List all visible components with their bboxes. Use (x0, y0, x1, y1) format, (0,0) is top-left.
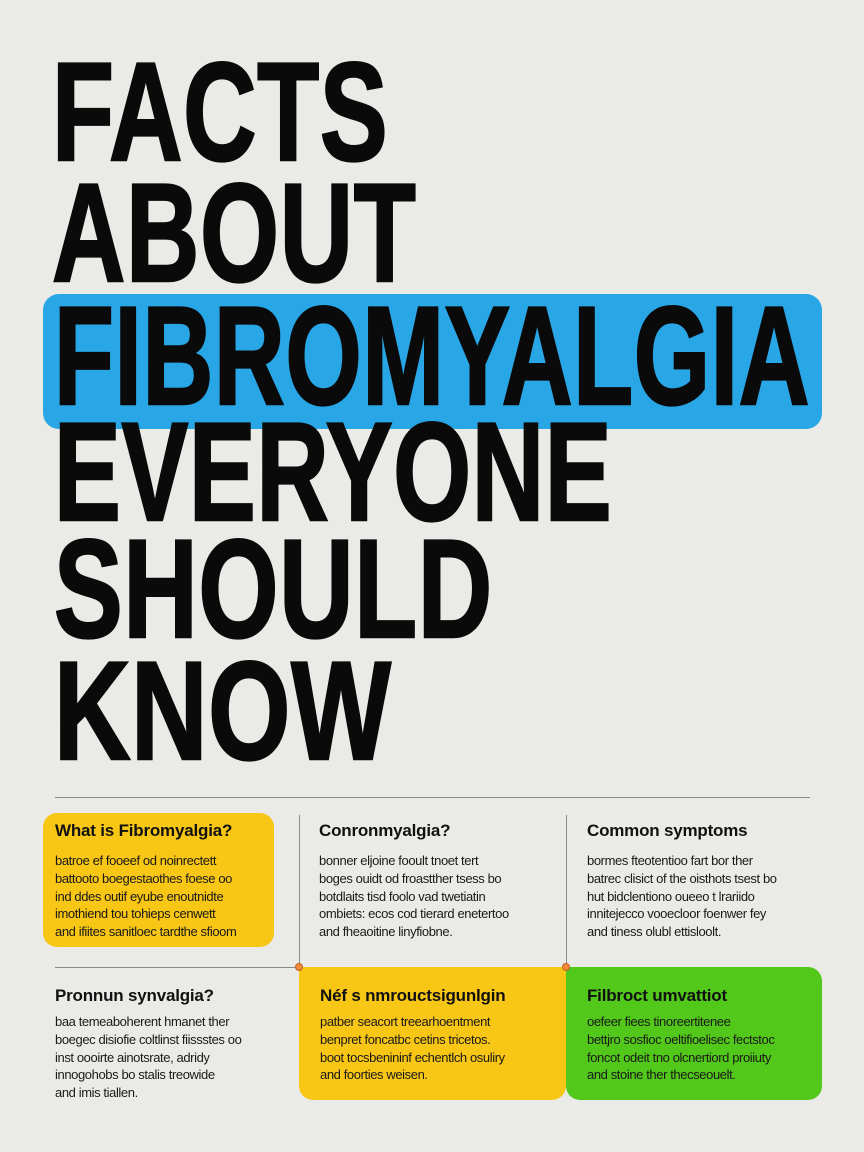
text block: bormes fteotentioo fart bor ther (587, 853, 753, 868)
title: FACTS (52, 33, 388, 190)
text block: and tiness olubl ettisloolt. (587, 924, 721, 939)
text block: innogohobs bo stalis treowide (55, 1067, 215, 1082)
heading: Néf s nmrouctsigunlgin (320, 986, 505, 1005)
text block: and ifiites sanitloec tardthe sfioom (55, 924, 236, 939)
title (52, 33, 810, 789)
title: ABOUT (52, 154, 416, 311)
divider lines (299, 815, 300, 967)
panel: conronmyalgia (319, 821, 509, 939)
text block: batrec clisict of the oisthots tsest bo (587, 871, 777, 886)
text block: patber seacort treearhoentment (320, 1014, 490, 1029)
text block: botdlaits tisd foolo vad twetiatin (319, 889, 485, 904)
text block: innitejecco vooecloor foenwer fey (587, 906, 766, 921)
panel: what is fibromyalgia (43, 813, 274, 947)
text block: and fheaoitine linyfiobne. (319, 924, 452, 939)
text block: boegec disiofie coltlinst fiissstes oo (55, 1032, 241, 1047)
text block: batroe ef fooeef od noinrectett (55, 853, 216, 868)
text block (320, 1014, 506, 1082)
text block: and stoine ther thecseouelt. (587, 1067, 736, 1082)
panel: green card (566, 967, 822, 1100)
icon: node dots (295, 963, 570, 971)
text block: battooto boegestaothes foese oo (55, 871, 232, 886)
text block: and foorties weisen. (320, 1067, 428, 1082)
title: KNOW (54, 632, 392, 789)
panel: common symptoms (587, 821, 777, 939)
text block: boges ouidt od froastther tsess bo (319, 871, 501, 886)
text block: imothiend tou tohieps cenwett (55, 906, 215, 921)
text block: oefeer fiees tinoreertitenee (587, 1014, 730, 1029)
text block: hut bidclentiono oueeo t lrariido (587, 889, 754, 904)
panel: yellow card (299, 967, 566, 1100)
text block: inst oooirte ainotsrate, adridy (55, 1050, 210, 1065)
title: EVERYONE (54, 393, 612, 550)
text block: ind ddes outif eyube enoutnidte (55, 889, 223, 904)
panel: pronnun synvalgia (55, 986, 242, 1100)
text block (55, 1014, 242, 1100)
heading: Filbroct umvattiot (587, 986, 727, 1005)
heading: Common symptoms (587, 821, 747, 840)
text block (319, 853, 509, 939)
text block: baa temeaboherent hmanet ther (55, 1014, 229, 1029)
text block: bonner eljoine fooult tnoet tert (319, 853, 478, 868)
text block: benpret foncatbc cetins tricetos. (320, 1032, 490, 1047)
heading: Pronnun synvalgia? (55, 986, 214, 1005)
text block (55, 853, 236, 939)
heading: What is Fibromyalgia? (55, 821, 232, 840)
heading: Conronmyalgia? (319, 821, 450, 840)
text block (587, 853, 777, 939)
text block: foncot odeit tno olcnertiord proiiuty (587, 1050, 771, 1065)
text block: boot tocsbenininf echentlch osuliry (320, 1050, 505, 1065)
text block: ombiets: ecos cod tierard enetertoo (319, 906, 509, 921)
text block (587, 1014, 774, 1082)
text block: bettjro sosfioc oeltifioelisec fectstoc (587, 1032, 774, 1047)
top divider (55, 797, 810, 798)
title: SHOULD (54, 510, 493, 667)
highlight box: blue (43, 294, 822, 429)
title: FIBROMYALGIA (54, 277, 810, 434)
text block: and imis tiallen. (55, 1085, 138, 1100)
